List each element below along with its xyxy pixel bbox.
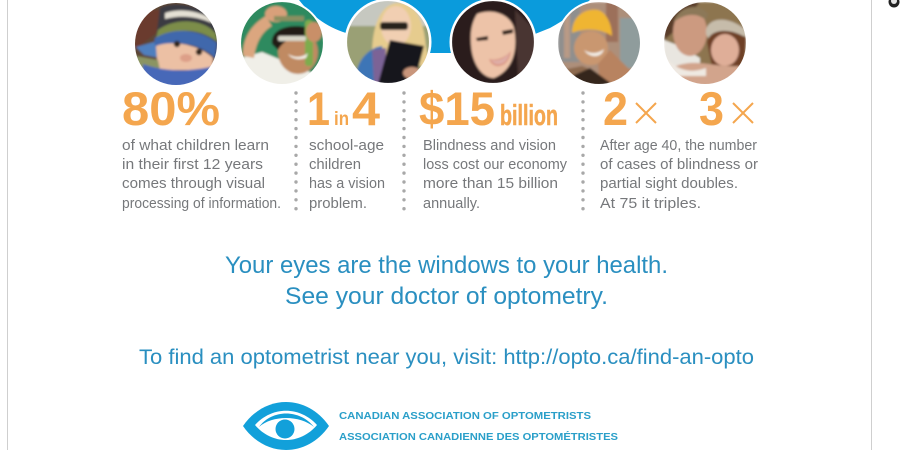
photo: girl with glasses and tablet bbox=[344, 0, 432, 86]
call to action: To find an optometrist near you, visit: http://opto.ca/find-an-opto bbox=[139, 346, 754, 369]
stat: $15 billion: billion bbox=[500, 100, 558, 132]
description: age risk bbox=[600, 138, 758, 212]
photo: older couple bbox=[664, 2, 746, 86]
description: economic cost bbox=[423, 138, 568, 212]
description: school-age children: children bbox=[309, 157, 361, 173]
description: age risk: After age 40, the number bbox=[600, 138, 757, 154]
description: school-age children: problem. bbox=[309, 196, 367, 212]
number: 80%: 80% bbox=[122, 82, 220, 135]
number: 2x: 2 bbox=[603, 82, 628, 135]
photo: worker in hard hat bbox=[556, 0, 642, 86]
description: economic cost: more than 15 billion bbox=[423, 176, 558, 192]
description: economic cost: Blindness and vision bbox=[423, 138, 556, 154]
description: age risk: At 75 it triples. bbox=[600, 196, 701, 212]
description: age risk: partial sight doubles. bbox=[600, 176, 738, 192]
stat: 2x 3x bbox=[600, 82, 758, 212]
stat: $15 billion bbox=[419, 82, 568, 212]
corner mark bbox=[888, 0, 900, 8]
description: school-age children: school-age bbox=[309, 138, 384, 154]
description: children learning: of what children learn bbox=[122, 138, 269, 154]
number: $15 billion: $15 bbox=[419, 82, 495, 135]
headline bbox=[225, 252, 668, 310]
stat: 80% bbox=[122, 82, 281, 212]
photo: boy with test tube bbox=[239, 0, 325, 86]
logo text: ASSOCIATION CANADIENNE DES OPTOMÉTRISTES bbox=[339, 430, 618, 443]
logo: eye bbox=[243, 402, 329, 450]
number: 3x: 3 bbox=[699, 82, 724, 135]
description: children learning: processing of information. bbox=[122, 196, 281, 212]
dotted divider 3 bbox=[581, 93, 585, 210]
icon: times sign 2x bbox=[636, 103, 656, 123]
description: children learning bbox=[122, 138, 281, 212]
blue header shape bbox=[299, 0, 590, 60]
description: school-age children: has a vision bbox=[309, 176, 385, 192]
logo text: CANADIAN ASSOCIATION OF OPTOMETRISTS bbox=[339, 410, 591, 422]
number: 1 in 4: 1 bbox=[307, 82, 330, 135]
description: school-age children bbox=[309, 138, 385, 212]
photo: baby in knit hat bbox=[135, 3, 217, 85]
stat: 1 in 4: 4 bbox=[352, 82, 380, 135]
headline: See your doctor of optometry. bbox=[285, 283, 608, 310]
description: economic cost: loss cost our economy bbox=[423, 157, 568, 173]
headline: Your eyes are the windows to your health. bbox=[225, 252, 668, 279]
logo text bbox=[339, 410, 618, 443]
description: children learning: comes through visual bbox=[122, 176, 265, 192]
stat: 1 in 4: in bbox=[334, 109, 349, 130]
dotted divider 2 bbox=[402, 93, 406, 210]
stat: 1 in 4 bbox=[307, 82, 385, 212]
dotted divider 1 bbox=[294, 93, 298, 210]
description: age risk: of cases of blindness or bbox=[600, 157, 758, 173]
description: children learning: in their first 12 years bbox=[122, 157, 263, 173]
photo: smiling woman bbox=[450, 0, 536, 86]
description: economic cost: annually. bbox=[423, 196, 480, 212]
icon: times sign 3x bbox=[733, 103, 753, 123]
